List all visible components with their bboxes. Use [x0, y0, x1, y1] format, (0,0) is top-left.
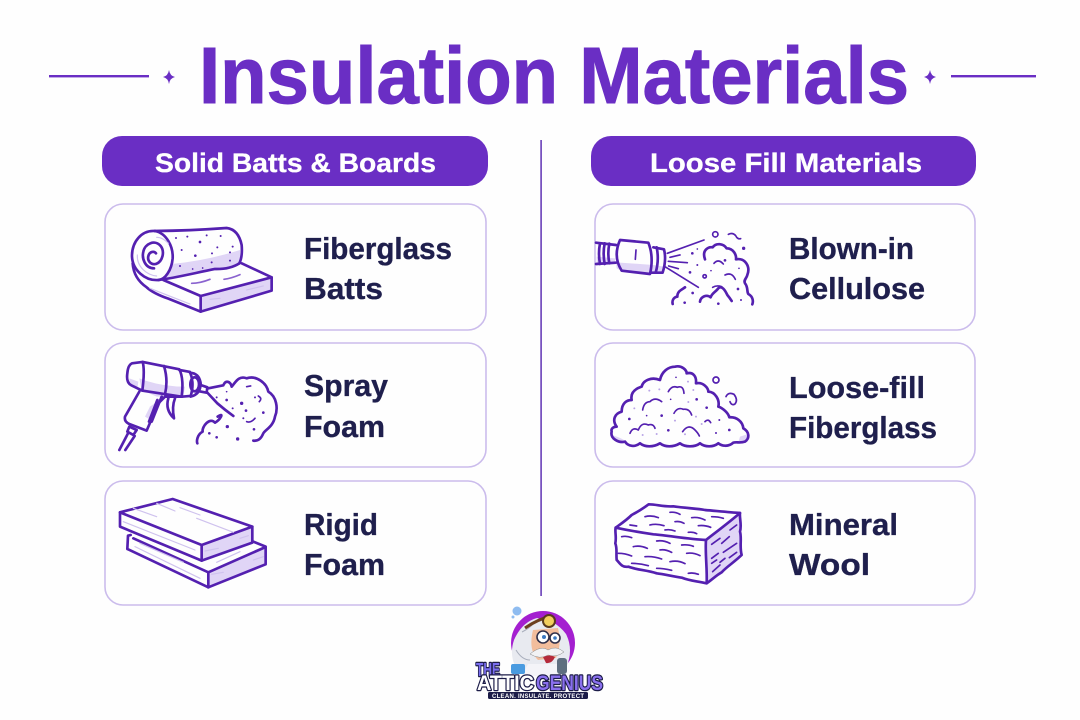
label: blown-in cellulose: [789, 231, 925, 306]
icon: loose-fill pile: [611, 366, 748, 446]
heading pill: solid batts and boards: [102, 136, 488, 186]
title: Insulation Materials: [199, 31, 909, 120]
panel: loose fill materials: [591, 136, 976, 605]
logo wordmark: THE: [476, 660, 500, 680]
card: loose-fill fiberglass: [595, 343, 975, 467]
label: fiberglass batts: Batts: [304, 271, 383, 306]
icon: blowing hose with cellulose: [596, 232, 753, 305]
icon: mineral wool block: [615, 504, 742, 583]
label: spray foam: [304, 368, 389, 444]
label: blown-in cellulose: Blown-in: [789, 231, 914, 266]
label: mineral wool: Mineral: [789, 507, 898, 542]
logo wordmark: GENIUS: [536, 672, 603, 695]
logo purple circle: [511, 611, 575, 675]
column divider: [540, 140, 542, 596]
title decoration: right rule and sparkle: [924, 70, 1036, 84]
label: rigid foam: Foam: [304, 547, 385, 582]
label: mineral wool: [789, 507, 898, 582]
label: mineral wool: Wool: [789, 547, 870, 582]
label: rigid foam: Rigid: [304, 507, 378, 542]
logo scientist mascot: [511, 615, 570, 676]
label: loose-fill fiberglass: Loose-fill: [789, 370, 925, 405]
logo wordmark: [476, 660, 603, 700]
label: spray foam: Spray: [304, 368, 389, 403]
icon: spray foam gun: [119, 362, 277, 450]
title decoration: left rule and sparkle: [49, 70, 175, 84]
heading pill: loose fill materials: Loose Fill Materials: [650, 148, 922, 178]
label: blown-in cellulose: Cellulose: [789, 271, 925, 306]
label: loose-fill fiberglass: [789, 370, 937, 445]
card: spray foam: [105, 343, 486, 467]
label: loose-fill fiberglass: Fiberglass: [789, 410, 937, 445]
card: mineral wool: [595, 481, 975, 605]
heading pill: solid batts and boards: Solid Batts & Boards: [155, 148, 436, 178]
label: fiberglass batts: Fiberglass: [304, 231, 452, 266]
heading pill: loose fill materials: [591, 136, 976, 186]
label: spray foam: Foam: [304, 409, 385, 444]
label: fiberglass batts: [304, 231, 452, 306]
icon: fiberglass roll: [132, 228, 272, 312]
card: rigid foam: [105, 481, 486, 605]
logo bubbles: [512, 606, 522, 618]
logo wordmark: ATTIC: [477, 672, 534, 695]
icon: rigid foam boards: [120, 499, 266, 587]
logo: the attic genius: [476, 606, 603, 700]
card: blown-in cellulose: [595, 204, 975, 330]
panel: solid batts and boards: [102, 136, 488, 605]
logo wordmark: CLEAN. INSULATE. PROTECT: [492, 694, 584, 700]
label: rigid foam: [304, 507, 385, 582]
card: fiberglass batts: [105, 204, 486, 330]
